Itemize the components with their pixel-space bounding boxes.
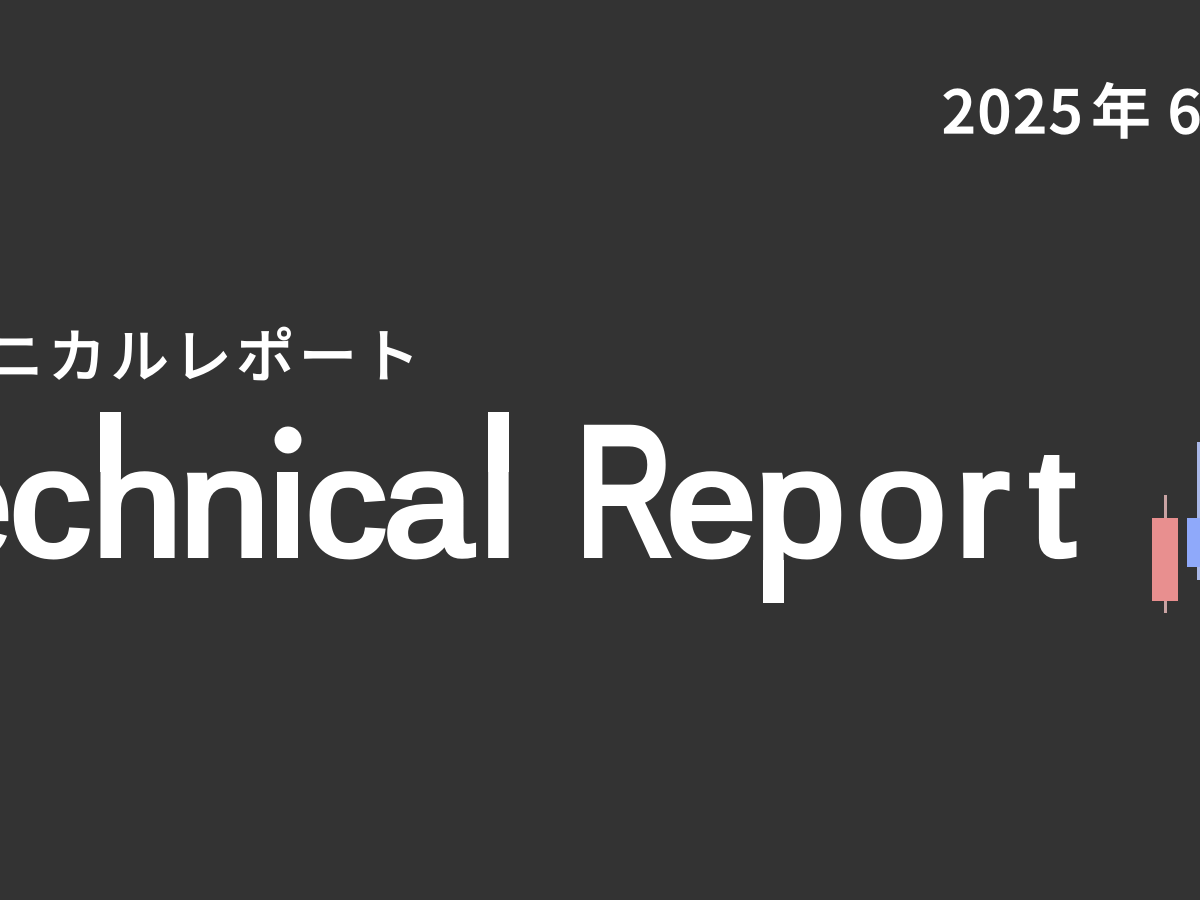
i dot mask <box>268 420 310 470</box>
title: Technical Report: eport <box>667 419 1074 587</box>
pink candle <box>1152 495 1178 613</box>
candlestick chart icon <box>1152 442 1200 613</box>
title: Technical Report: R <box>576 389 673 593</box>
blue candle <box>1187 442 1200 580</box>
h ascender <box>100 412 121 472</box>
l ascender <box>488 412 509 472</box>
title: Technical Report <box>0 389 1074 603</box>
i stem <box>277 472 298 558</box>
i dot <box>274 426 302 454</box>
p descender <box>763 560 784 603</box>
